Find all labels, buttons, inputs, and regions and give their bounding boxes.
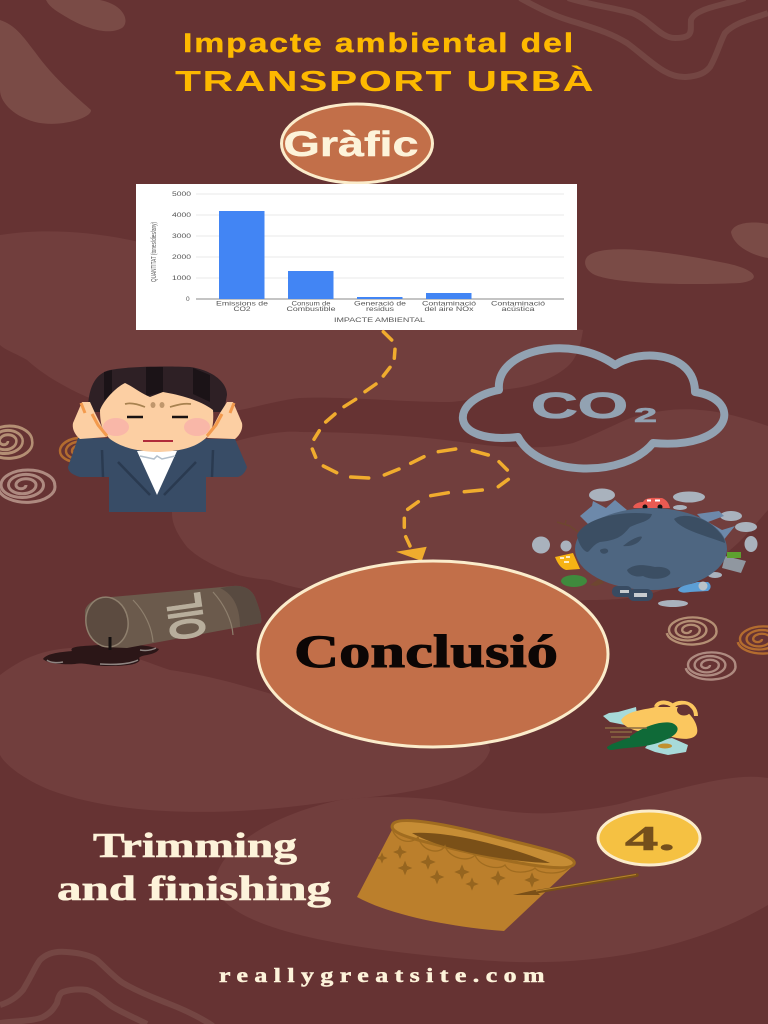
y axis labels: 4000 [172, 212, 191, 219]
y axis labels: 1000 [172, 275, 191, 282]
car [633, 498, 670, 508]
footer url: reallygreatsite.com [219, 965, 551, 987]
icon: CO2 cloud [463, 348, 724, 469]
bar chart [136, 184, 577, 330]
dashed arrow [312, 332, 508, 561]
title line 1: Impacte ambiental del [183, 28, 575, 58]
panel: conclusion oval [258, 561, 608, 747]
x axis labels: Contaminació [422, 302, 477, 308]
icon: CO2 cloud: CO [531, 385, 628, 426]
title line 2: TRANSPORT URBÀ [175, 64, 595, 98]
icon: polluted earth [532, 488, 758, 607]
heading badge: Gràfic [282, 104, 432, 183]
bottle [678, 582, 711, 593]
bush [561, 575, 587, 587]
x axis labels: del aire NOx [424, 307, 474, 313]
badge: step 4: 4. [625, 819, 675, 858]
icon: oil barrel [43, 586, 261, 666]
decorative spirals left [0, 426, 103, 502]
icon: CO2 cloud: 2 [634, 405, 657, 427]
heading badge: Gràfic: Gràfic [284, 125, 418, 164]
globe [575, 508, 727, 590]
x axis labels: Combustible [286, 307, 336, 313]
heading: trimming and finishing [57, 826, 332, 908]
x axis labels: Generació de [354, 302, 407, 308]
x axis labels [216, 302, 546, 313]
badge: step 4 [598, 811, 700, 865]
icon: basket [357, 821, 637, 931]
x axis labels: acústica [502, 307, 535, 313]
icon: worried person [68, 366, 247, 512]
basket stars [376, 845, 540, 891]
heading: trimming and finishing: Trimming [93, 826, 298, 865]
shirt [137, 451, 177, 495]
x axis labels: Emissions de [216, 302, 269, 308]
x axis labels: Consum de [292, 302, 331, 308]
dark cars [612, 586, 632, 597]
oil spill [43, 644, 159, 666]
factories [580, 500, 627, 526]
y axis labels [172, 191, 191, 303]
taxi [555, 553, 580, 570]
barrel label: OIL [155, 590, 217, 643]
x axis labels: residus [366, 307, 394, 313]
icon: amphora and trash [603, 703, 697, 755]
hair [88, 366, 227, 412]
decorative spirals right [667, 617, 768, 680]
x axis labels: CO2 [234, 307, 251, 313]
hands [73, 402, 107, 439]
bus and truck [722, 556, 746, 573]
bars [219, 211, 472, 299]
smoke [532, 488, 758, 607]
face [100, 383, 213, 452]
title [175, 28, 595, 98]
y axis labels: 5000 [172, 191, 191, 198]
needle [513, 890, 540, 895]
y axis title: QUANTITAT (tones/dies/any) [151, 222, 158, 282]
x axis labels: Contaminació [491, 302, 546, 308]
bare tree [557, 520, 578, 532]
jacket [68, 438, 247, 512]
heading: trimming and finishing: and finishing [57, 869, 332, 908]
panel: conclusion oval: Conclusió [294, 626, 558, 678]
y axis labels: 0 [186, 296, 190, 303]
barrel body [85, 586, 261, 648]
y axis labels: 3000 [172, 233, 191, 240]
x axis title: IMPACTE AMBIENTAL [334, 318, 426, 324]
y axis labels: 2000 [172, 254, 191, 261]
